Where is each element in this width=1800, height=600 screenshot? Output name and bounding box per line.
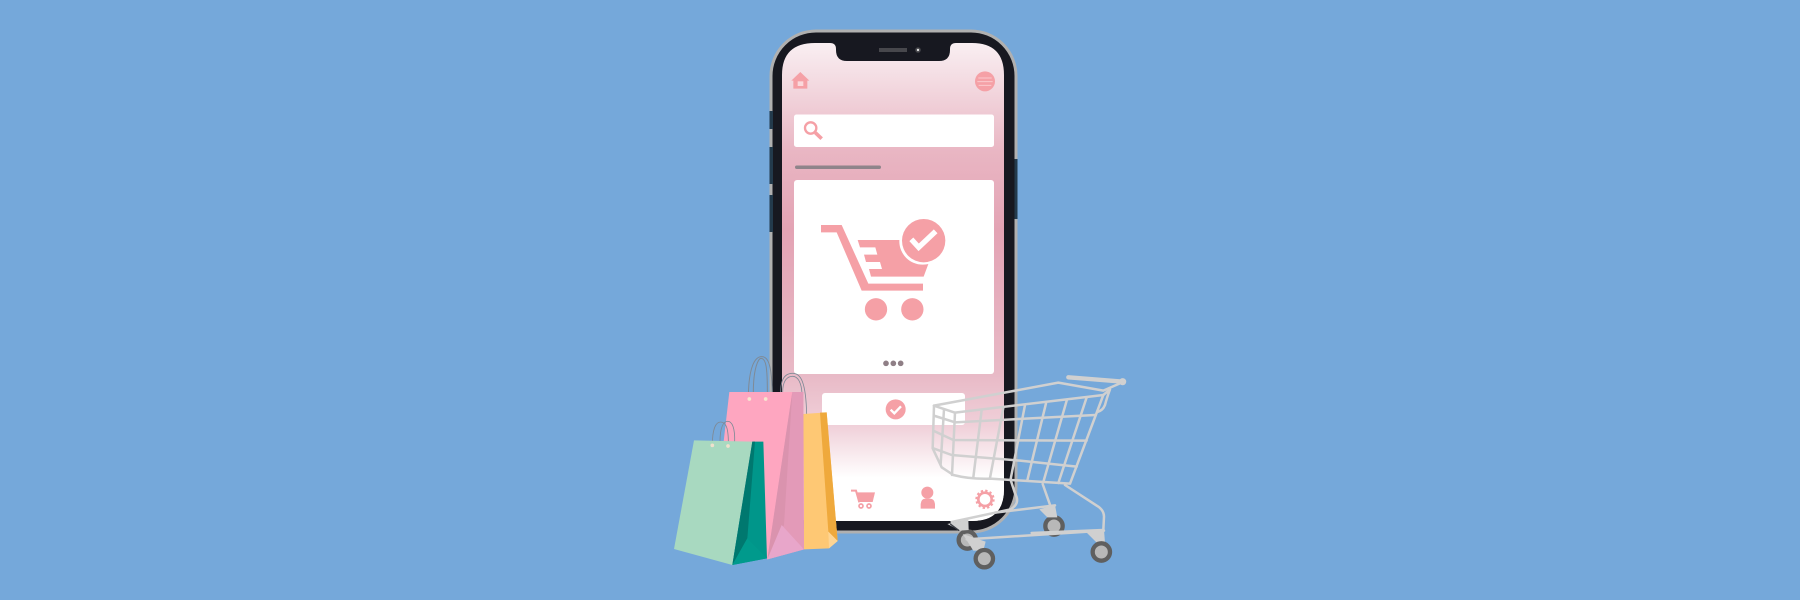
icon: person	[921, 487, 935, 509]
cart basket	[933, 383, 1122, 484]
icon: big cart with check	[821, 218, 946, 320]
speaker and camera	[879, 47, 921, 53]
icon: check circle	[886, 399, 906, 419]
cart handle	[1068, 377, 1125, 384]
cart wheels front	[976, 543, 1110, 567]
phone screen	[782, 43, 1004, 521]
cart wheels back	[959, 517, 1063, 549]
phone body	[771, 31, 1016, 532]
phone side buttons	[770, 111, 1018, 232]
icon: gear	[976, 491, 994, 508]
bottom navigation	[782, 477, 1004, 521]
green bag	[674, 421, 767, 565]
icon: magnifier	[805, 122, 822, 139]
shopping bags	[674, 357, 838, 565]
main product card	[794, 180, 994, 374]
icon: menu	[975, 71, 995, 91]
search bar	[794, 114, 994, 147]
icon: home	[791, 72, 809, 89]
cart wheel mounts	[947, 505, 1105, 551]
icon: small cart	[851, 491, 875, 508]
section line	[795, 166, 881, 169]
pagination dots	[883, 360, 903, 366]
confirm button	[822, 393, 965, 425]
phone	[770, 31, 1018, 532]
cart corner slot	[951, 524, 959, 530]
cart frame	[952, 480, 1104, 539]
shopping cart	[933, 377, 1125, 567]
pink bag	[720, 357, 804, 559]
orange bag	[781, 373, 838, 549]
